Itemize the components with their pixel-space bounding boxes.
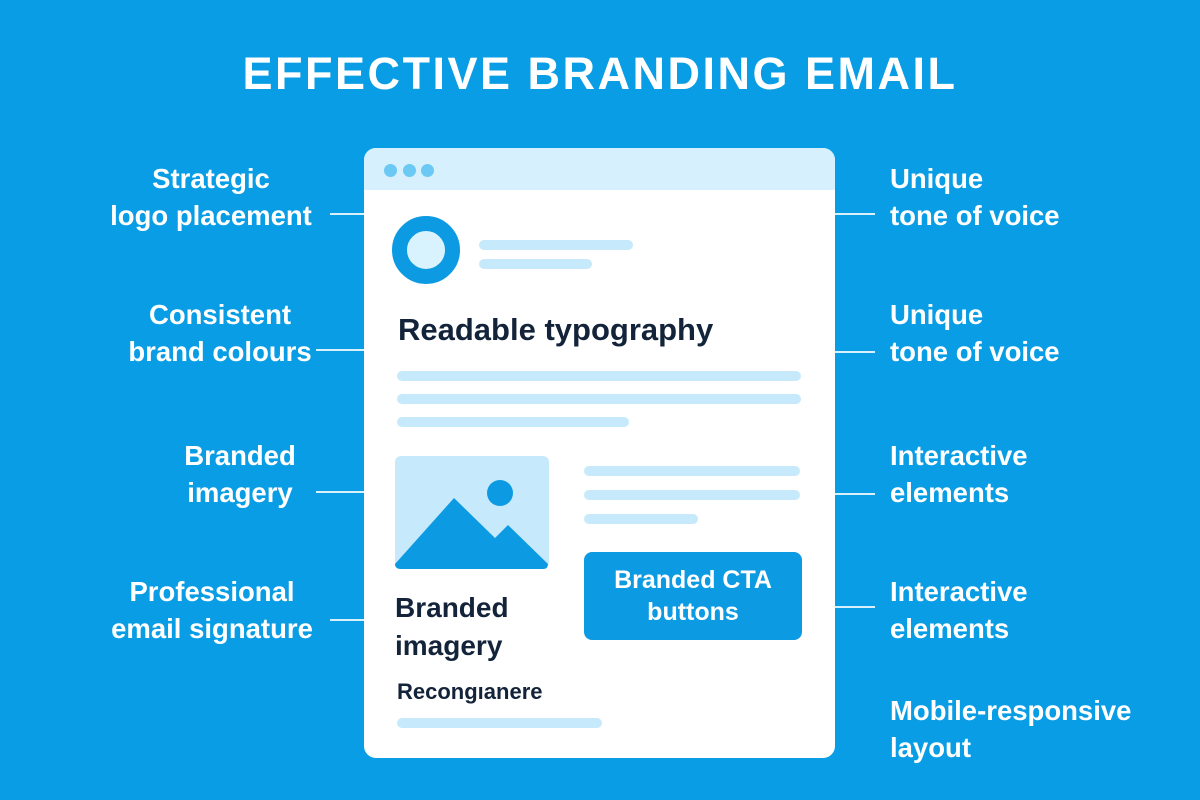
- label: interactive elements 2: elements: [890, 613, 1009, 644]
- CTA button: buttons: [647, 598, 739, 626]
- label: unique tone of voice 1: [890, 163, 1060, 231]
- label: unique tone of voice 1: Unique: [890, 163, 983, 194]
- heading: readable typography: Readable typography: [398, 312, 713, 347]
- label: mobile-responsive layout: layout: [890, 732, 971, 763]
- label: interactive elements 1: [890, 440, 1028, 508]
- label: branded imagery: Branded: [184, 440, 296, 471]
- icon: logo circle: [392, 216, 460, 284]
- CTA button: [584, 552, 802, 640]
- label: strategic logo placement: logo placement: [110, 200, 312, 231]
- label: professional email signature: Professional: [129, 576, 295, 607]
- label: interactive elements 1: Interactive: [890, 440, 1028, 471]
- browser header: [364, 148, 835, 190]
- label: unique tone of voice 2: [890, 299, 1060, 367]
- label: unique tone of voice 2: tone of voice: [890, 336, 1060, 367]
- text: branded imagery: Branded: [395, 592, 509, 623]
- label: strategic logo placement: [110, 163, 312, 231]
- label: mobile-responsive layout: Mobile-responsive: [890, 695, 1131, 726]
- label: mobile-responsive layout: [890, 695, 1131, 763]
- email card: [364, 148, 835, 758]
- label: strategic logo placement: Strategic: [152, 163, 270, 194]
- CTA button: Branded CTA: [614, 566, 772, 594]
- text: branded imagery: [395, 592, 509, 661]
- label: unique tone of voice 2: Unique: [890, 299, 983, 330]
- label: interactive elements 2: Interactive: [890, 576, 1028, 607]
- icon: image placeholder: [395, 456, 549, 569]
- label: interactive elements 1: elements: [890, 477, 1009, 508]
- label: branded imagery: [184, 440, 296, 508]
- label: unique tone of voice 1: tone of voice: [890, 200, 1060, 231]
- label: branded imagery: imagery: [187, 477, 293, 508]
- label: consistent brand colours: [128, 299, 312, 367]
- text: branded imagery: imagery: [395, 630, 502, 661]
- title: EFFECTIVE BRANDING EMAIL: [242, 48, 958, 99]
- label: professional email signature: email signature: [111, 613, 313, 644]
- label: interactive elements 2: [890, 576, 1028, 644]
- label: consistent brand colours: Consistent: [149, 299, 291, 330]
- label: professional email signature: [111, 576, 313, 644]
- label: consistent brand colours: brand colours: [128, 336, 312, 367]
- text: recognition: Recongıanere: [397, 679, 542, 704]
